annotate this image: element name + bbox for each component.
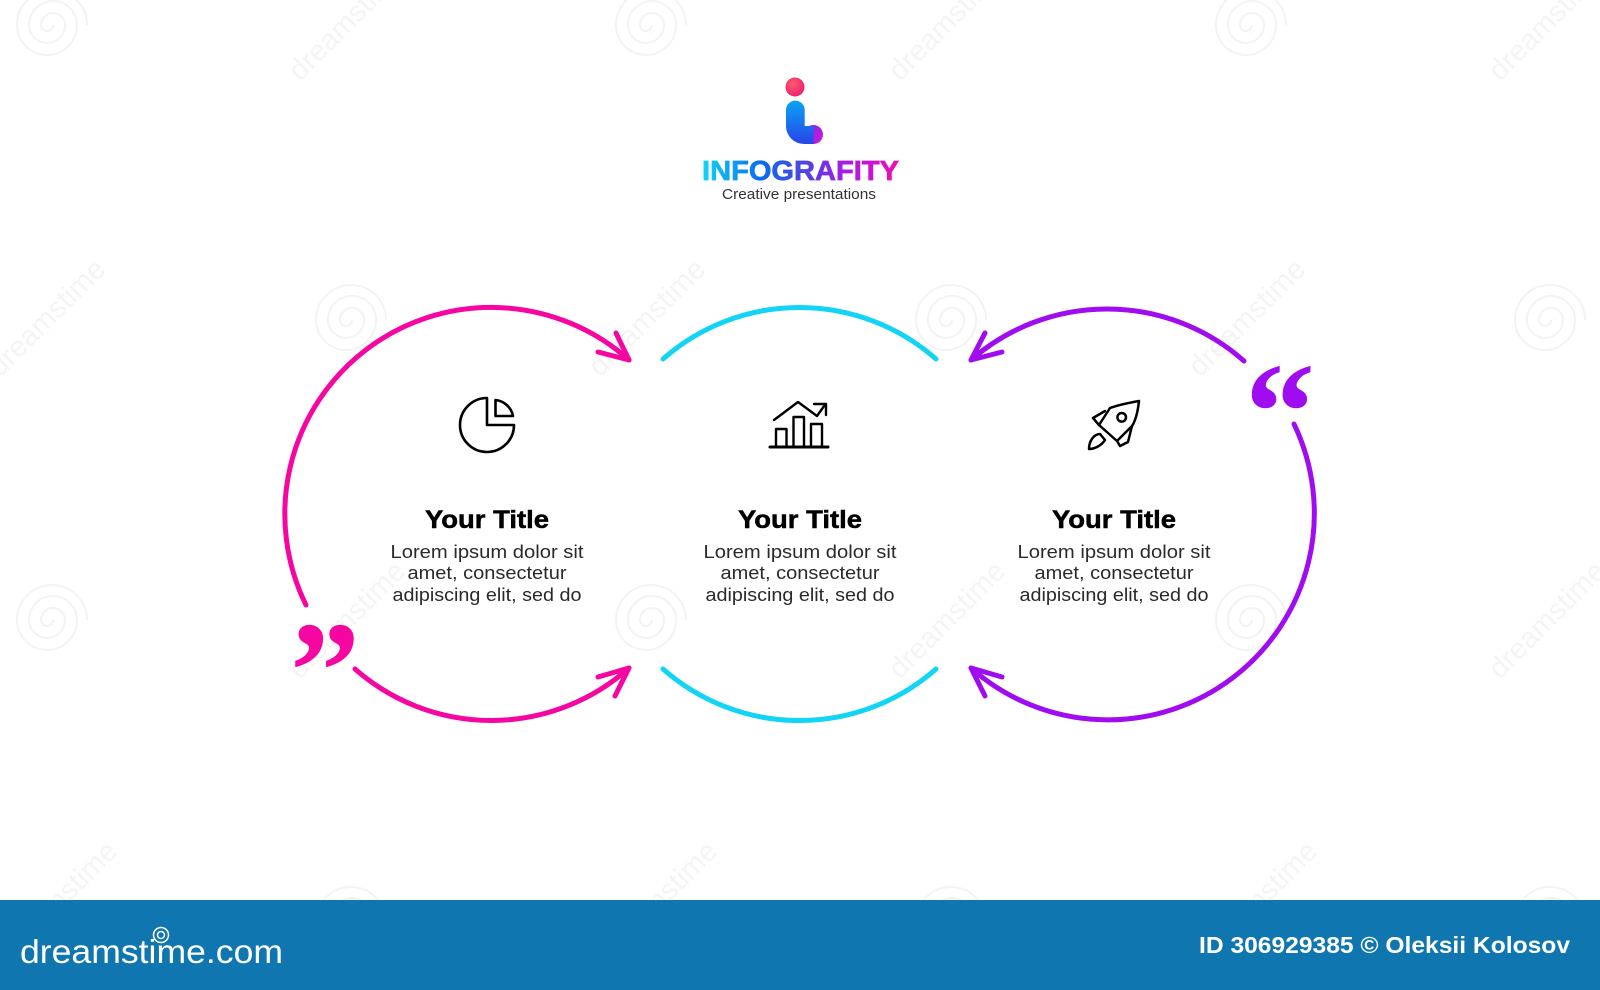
middle body text: Lorem ipsum dolor sit: [704, 541, 896, 562]
watermark pattern: dreamstime: [582, 253, 712, 383]
left body text: amet, consectetur: [408, 562, 566, 583]
panel: middle arcs: [663, 307, 936, 721]
middle bottom arc: [663, 669, 936, 721]
right body text: Lorem ipsum dolor sit: [1018, 541, 1210, 562]
text block: right: [1018, 506, 1210, 605]
watermark pattern: dreamstime: [1182, 253, 1312, 383]
logo: [702, 78, 899, 203]
right body text: [1018, 541, 1210, 605]
right body text: adipiscing elit, sed do: [1020, 584, 1208, 605]
logo mark: [786, 78, 823, 144]
left body text: [390, 541, 584, 605]
right body text: amet, consectetur: [1034, 562, 1194, 583]
left title: Your Title: [425, 506, 549, 534]
watermark pattern: dreamstime: [282, 555, 412, 685]
left lower arrow arc: [355, 668, 629, 720]
text block: left: [390, 506, 584, 605]
icon: pie chart: [460, 398, 514, 452]
logo wordmark: INFOGRAFITY: [702, 155, 899, 186]
icon: rocket: [1089, 401, 1139, 449]
right lower arrow arc: [971, 424, 1314, 720]
footer brand name: dreamstime.com: [20, 933, 283, 970]
right opening quote mark: “: [1245, 335, 1315, 490]
footer image id and author: ID 306929385 © Oleksii Kolosov: [1199, 932, 1570, 958]
footer bar: [0, 900, 1600, 990]
icon: bar chart with rising arrow: [770, 402, 828, 447]
watermark pattern: dreamstime: [1194, 835, 1324, 965]
left body text: Lorem ipsum dolor sit: [390, 541, 584, 562]
left body text: adipiscing elit, sed do: [392, 584, 582, 605]
watermark pattern: dreamstime: [882, 555, 1012, 685]
panel: left loop: [285, 307, 629, 749]
middle body text: [704, 541, 896, 605]
footer spiral icon: [154, 928, 168, 942]
watermark pattern: dreamstime: [594, 835, 724, 965]
left upper arrow arc: [285, 307, 629, 605]
middle title: Your Title: [738, 506, 862, 534]
middle body text: adipiscing elit, sed do: [706, 584, 894, 605]
right upper arrow arc: [971, 309, 1244, 361]
middle body text: amet, consectetur: [720, 562, 880, 583]
left closing quote mark: ”: [290, 594, 360, 749]
text block: middle: [704, 506, 896, 605]
logo tagline: Creative presentations: [722, 187, 876, 203]
panel: right loop: [971, 309, 1315, 720]
right title: Your Title: [1052, 506, 1176, 534]
middle top arc: [663, 307, 936, 359]
